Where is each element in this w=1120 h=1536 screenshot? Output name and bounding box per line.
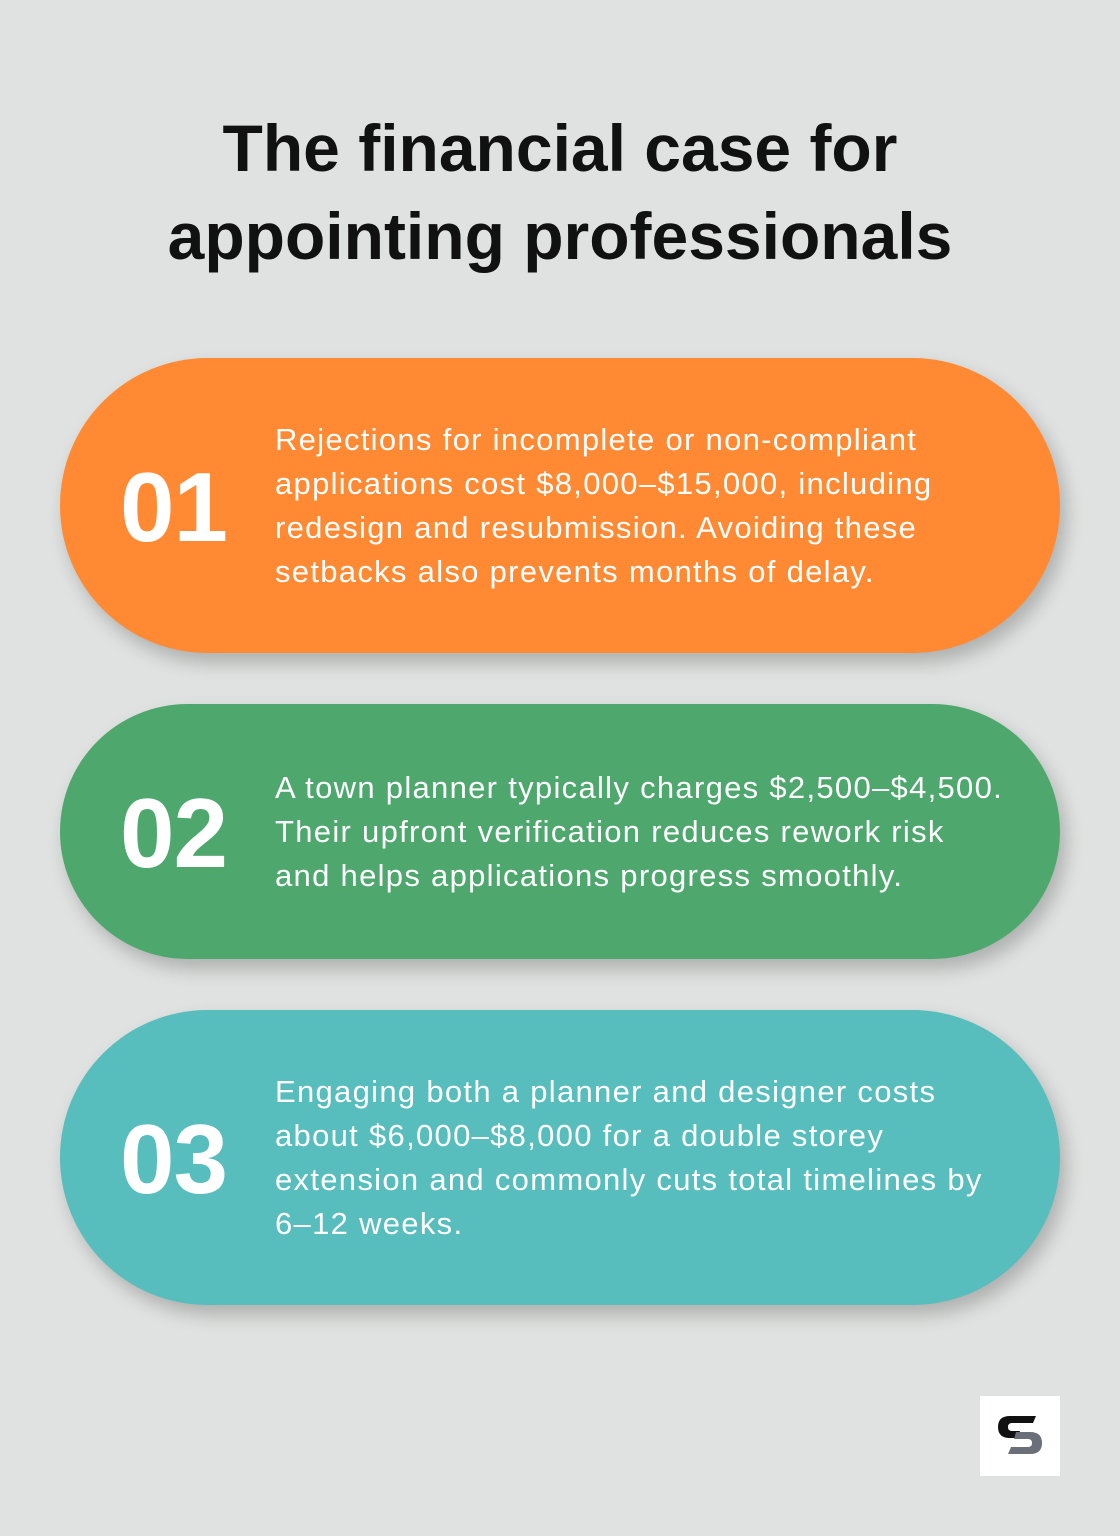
text 02: and helps applications progress smoothly. (275, 858, 903, 893)
text 03: about $6,000–$8,000 for a double storey (275, 1118, 884, 1153)
text 02: A town planner typically charges $2,500–$4,500. (275, 770, 1003, 805)
text 02 (275, 770, 1003, 893)
text 01: applications cost $8,000–$15,000, including (275, 466, 932, 501)
text 03 (275, 1074, 983, 1241)
text 03: Engaging both a planner and designer costs (275, 1074, 936, 1109)
text 01: setbacks also prevents months of delay. (275, 554, 875, 589)
title: The financial case for (223, 111, 897, 185)
text 01 (275, 422, 932, 589)
panel: card 03 (60, 1010, 1060, 1305)
text 03: extension and commonly cuts total timelines by (275, 1162, 983, 1197)
text 01: redesign and resubmission. Avoiding these (275, 510, 917, 545)
panel: card 01 (60, 358, 1060, 653)
title: appointing professionals (168, 199, 952, 273)
text 01: Rejections for incomplete or non-compliant (275, 422, 917, 457)
logo (980, 1396, 1060, 1476)
number 01: 01 (120, 452, 227, 562)
text 02: Their upfront verification reduces rework risk (275, 814, 945, 849)
number 02: 02 (120, 778, 227, 888)
title (168, 111, 952, 273)
number 03: 03 (120, 1104, 227, 1214)
text 03: 6–12 weeks. (275, 1206, 463, 1241)
panel: card 02 (60, 704, 1060, 959)
